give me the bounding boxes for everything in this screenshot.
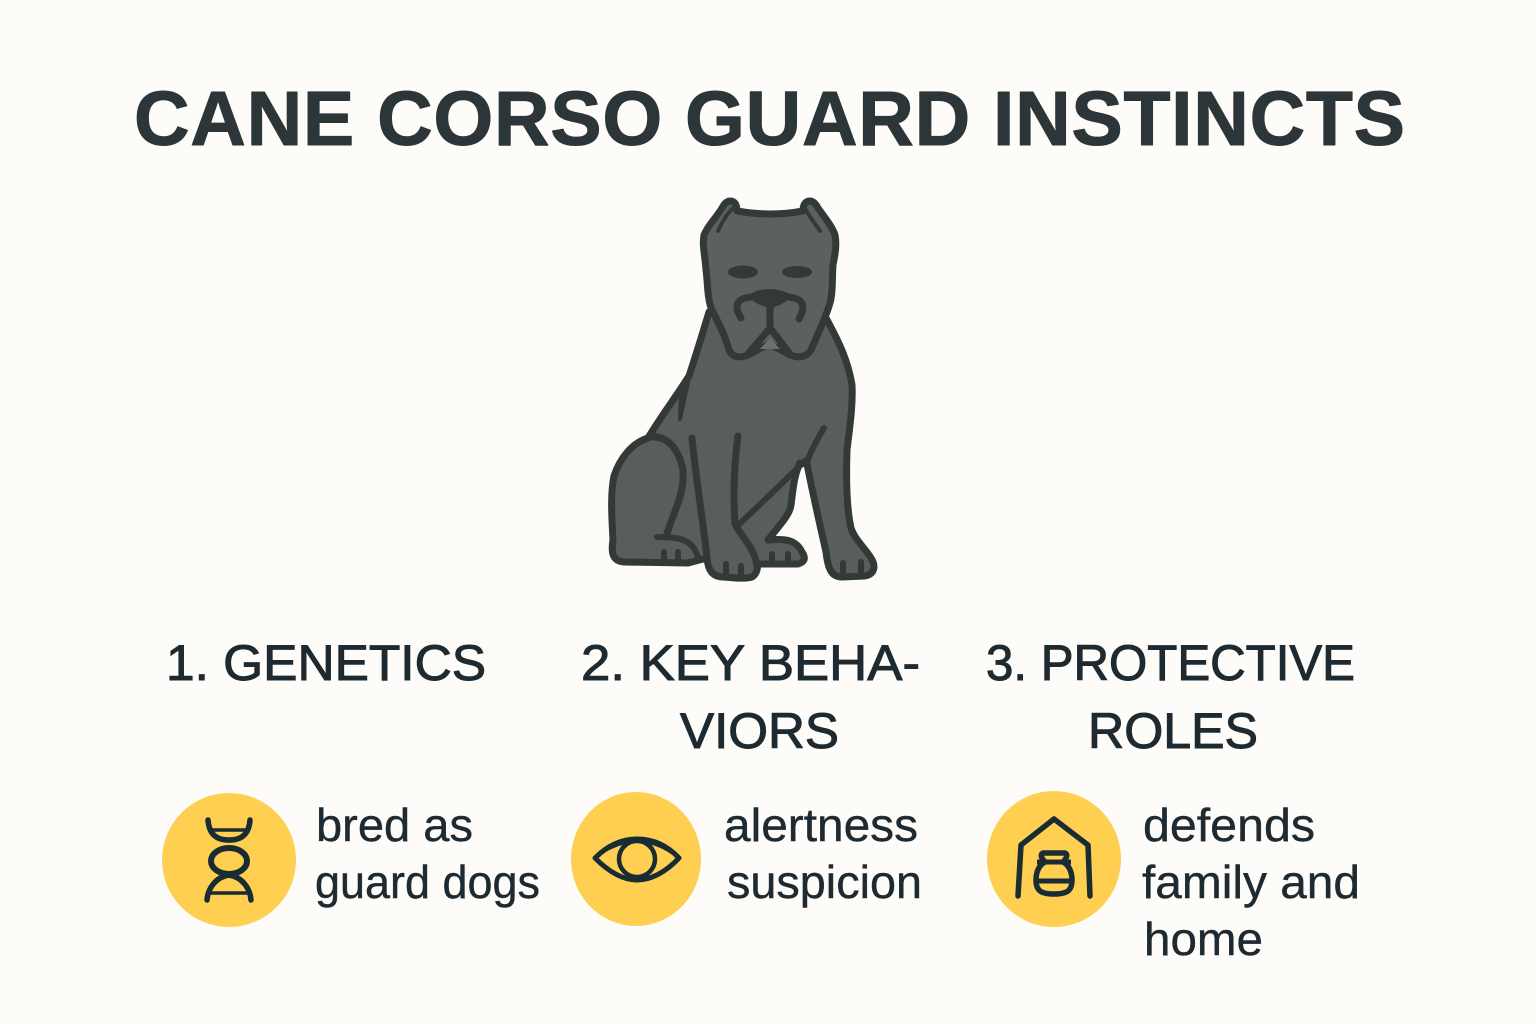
heading: protective roles: ROLES (1088, 703, 1258, 759)
ear inner marks (718, 209, 732, 231)
section 1: genetics (162, 635, 540, 927)
description: protective roles: home (1144, 913, 1263, 965)
toes (664, 552, 861, 577)
heading: genetics: 1. GENETICS (166, 635, 486, 691)
chest and leg lines (674, 378, 689, 419)
description: genetics: guard dogs (315, 856, 540, 908)
icon: dna (162, 793, 296, 927)
description: genetics: bred as (316, 799, 473, 851)
eyes (728, 266, 758, 278)
muzzle and nose (737, 292, 803, 319)
icon: eye (571, 792, 701, 926)
description: key behaviors: alertness (724, 799, 918, 851)
illustration: seated cane corso (612, 201, 874, 578)
description: protective roles: defends (1143, 799, 1315, 851)
description: key behaviors: suspicion (727, 856, 922, 908)
section 2: key behaviors (571, 635, 922, 926)
title: CANE CORSO GUARD INSTINCTS (134, 76, 1405, 162)
dog head (703, 201, 836, 357)
dog body (612, 312, 874, 578)
heading: key behaviors: 2. KEY BEHA- (581, 635, 920, 691)
heading: key behaviors: VIORS (680, 703, 839, 759)
section 3: protective roles (986, 635, 1360, 965)
heading: protective roles: 3. PROTECTIVE (986, 635, 1355, 691)
icon: house with guarded jar (987, 791, 1121, 927)
description: protective roles: family and (1142, 856, 1360, 908)
